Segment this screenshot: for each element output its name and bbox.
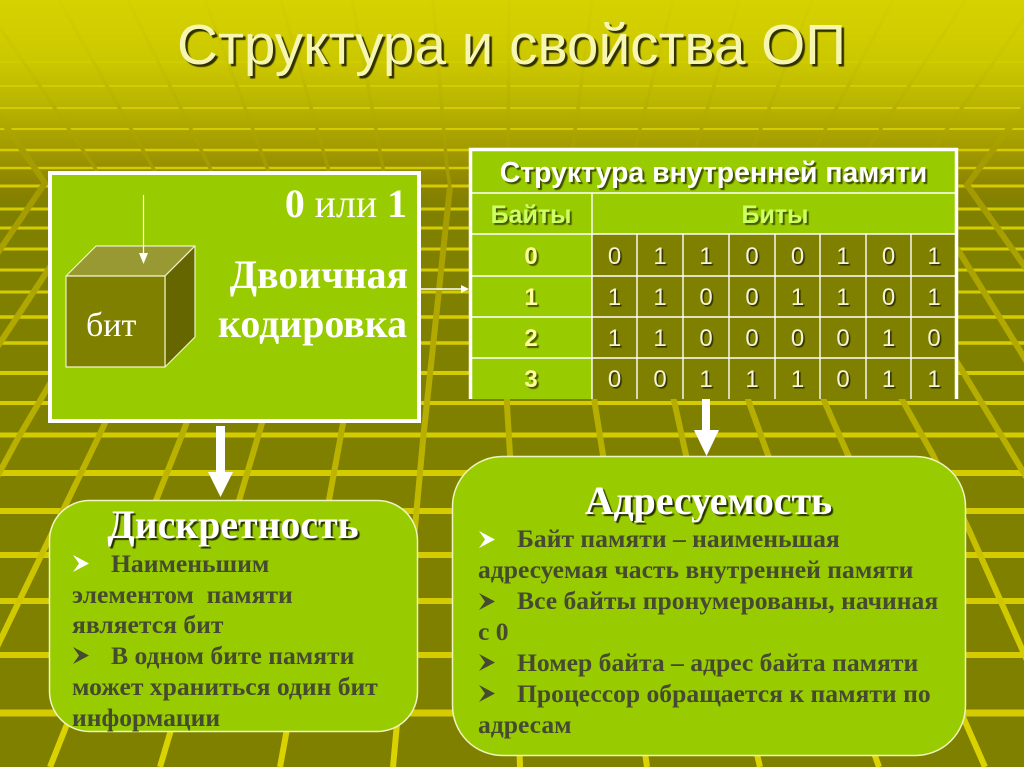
heading: discreteness: Дискретность	[107, 503, 359, 547]
title: Структура и свойства ОП	[177, 14, 846, 77]
row 3: 0	[608, 366, 621, 393]
row 2: 2	[524, 325, 538, 352]
row 0	[524, 243, 941, 270]
row 1: 0	[882, 284, 895, 311]
row 2: 1	[653, 325, 667, 352]
text: binary coding: Двоичная	[230, 253, 408, 297]
row 2: 0	[836, 325, 850, 352]
column header: bits: Биты	[742, 201, 808, 229]
row 3: 1	[745, 366, 759, 393]
icon: bit cube	[66, 246, 195, 367]
panel: discreteness	[50, 500, 418, 732]
bullet list: addressability: Номер байта – адрес байта памяти	[517, 648, 918, 677]
bullet list: discreteness	[72, 549, 378, 732]
row 1: 1	[927, 284, 941, 311]
row 0: 0	[608, 243, 621, 270]
text: binary coding: кодировка	[218, 302, 407, 346]
bullet list: addressability: адресам	[478, 710, 572, 739]
table heading: Структура внутренней памяти	[500, 157, 927, 189]
row 2: 0	[699, 325, 713, 352]
row 1: 0	[745, 284, 759, 311]
row 2: 0	[791, 325, 804, 352]
label: bit: бит	[86, 307, 136, 344]
row 3: 0	[836, 366, 850, 393]
bullet list: addressability: Процессор обращается к памяти по	[517, 679, 931, 708]
arrow: to discreteness	[208, 426, 233, 497]
bullet list: discreteness: Наименьшим	[111, 549, 269, 578]
row 0: 0	[524, 243, 538, 270]
bullet list: discreteness: может храниться один бит	[72, 672, 378, 701]
row 3: 1	[699, 366, 713, 393]
panel: addressability	[452, 456, 966, 756]
row 0: 1	[927, 243, 941, 270]
bullet list: addressability: с 0	[478, 617, 509, 646]
row 1: 1	[653, 284, 667, 311]
row 2	[524, 325, 941, 352]
row 3: 1	[791, 366, 804, 393]
row 0: 1	[699, 243, 713, 270]
arrow: into cube	[139, 195, 148, 264]
bullet list: discreteness: является бит	[72, 610, 224, 639]
bullet list: addressability: Все байты пронумерованы, начиная	[517, 586, 938, 615]
bullet list: addressability	[478, 524, 938, 739]
row 0: 0	[745, 243, 759, 270]
bullet list: discreteness: элементом памяти	[72, 580, 293, 609]
row 3	[524, 366, 941, 393]
text: binary coding	[218, 253, 408, 346]
row 0: 0	[882, 243, 895, 270]
row 2: 0	[745, 325, 759, 352]
panel: bit and binary coding	[50, 173, 419, 421]
row 3: 0	[653, 366, 667, 393]
row 0: 0	[791, 243, 804, 270]
row 3: 3	[524, 366, 538, 393]
row 1: 1	[836, 284, 850, 311]
bullet list: discreteness: информации	[72, 703, 220, 732]
row 1	[524, 284, 941, 311]
row 2: 1	[608, 325, 621, 352]
row 3: 1	[927, 366, 941, 393]
row 0: 1	[836, 243, 850, 270]
arrow: to memory table	[421, 285, 469, 293]
row 1: 1	[791, 284, 804, 311]
bullet list: discreteness: В одном бите памяти	[111, 641, 355, 670]
column header: bytes: Байты	[491, 201, 571, 229]
row 1: 0	[699, 284, 713, 311]
row 3: 1	[882, 366, 895, 393]
panel: internal memory table	[469, 148, 958, 399]
text: 0 or 1: 0 или 1	[285, 182, 407, 226]
row 2: 0	[927, 325, 941, 352]
row 1: 1	[608, 284, 621, 311]
bullet list: addressability: адресуемая часть внутренней памяти	[478, 555, 914, 584]
bullet list: addressability: Байт памяти – наименьшая	[517, 524, 840, 553]
row 1: 1	[524, 284, 538, 311]
row 0: 1	[653, 243, 667, 270]
arrow: to addressability	[694, 399, 719, 456]
row 2: 1	[882, 325, 895, 352]
heading: addressability: Адресуемость	[585, 479, 832, 523]
